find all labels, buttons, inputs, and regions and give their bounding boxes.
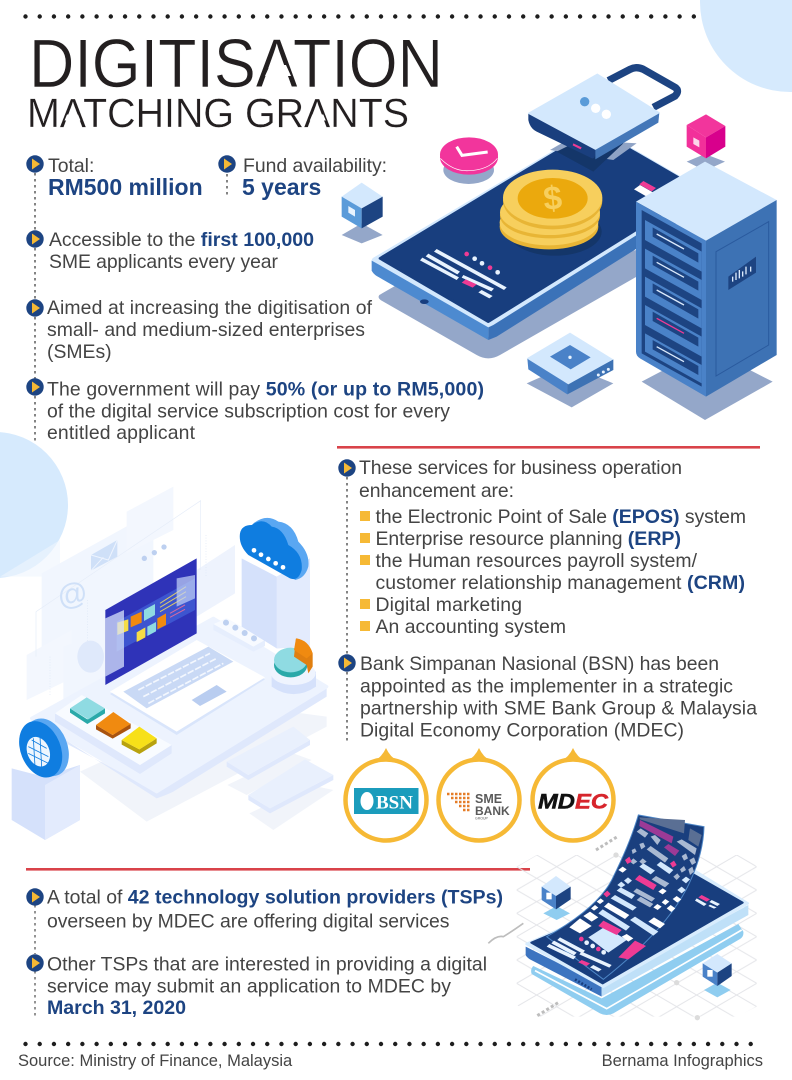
list: services: customer relationship management (CRM): [376, 572, 745, 594]
list: services: Enterprise resource planning (ERP): [376, 528, 681, 550]
phone: [372, 129, 703, 340]
fact: accessible: SME applicants every year: [49, 251, 279, 273]
fact: fund availability: Fund availability:: [243, 155, 387, 177]
list: services: the Human resources payroll system/: [376, 550, 698, 572]
text: BSN implementer: appointed as the implementer in a strategic: [360, 676, 733, 698]
small pill panel: [213, 618, 265, 652]
fact: fund availability: 5 years: [242, 174, 321, 200]
divider: lower red rule: [26, 868, 530, 871]
fact: TSPs: overseen by MDEC are offering digital services: [47, 910, 450, 932]
desk: [32, 618, 327, 798]
shadow of desk: [80, 703, 327, 822]
laptop screen: [105, 558, 197, 685]
dotted rule: top: [26, 14, 705, 19]
fact: TSPs: A total of 42 technology solution providers (TSPs): [47, 886, 503, 908]
list: services: the Electronic Point of Sale (EPOS) system: [376, 506, 746, 528]
colour key tray: [55, 695, 172, 774]
fact: other TSPs: March 31, 2020: [47, 997, 186, 1019]
phone body: [526, 870, 748, 997]
illustration: phone with coins, padlock and server: [372, 68, 777, 420]
ghost panels: [0, 487, 235, 700]
fact: government payment: entitled applicant: [47, 422, 196, 444]
dotted rule: bottom: [26, 1042, 763, 1046]
title: DIGITISATION: [29, 25, 443, 102]
illustration: phone with curling document: [488, 815, 757, 1020]
icon: blue cube: [342, 183, 383, 243]
fact: aim: (SMEs): [47, 341, 112, 363]
fact: government payment: of the digital service subscription cost for every: [47, 400, 450, 422]
logo: SME Bank: SME: [475, 792, 502, 806]
gold coin stack: [500, 170, 602, 256]
icon: cube right: [703, 954, 732, 997]
server rack: [636, 162, 777, 420]
fact: total: RM500 million: [48, 174, 203, 200]
logo: BSN: BSN: [376, 792, 413, 814]
decorative circle: top right: [700, 0, 792, 92]
icon: at sign: @: [54, 576, 91, 614]
fact: other TSPs: Other TSPs that are interested in providing a digital: [47, 954, 487, 976]
bullet markers and dotted connectors: [26, 155, 356, 1018]
text: services: enhancement are:: [359, 480, 514, 502]
title: MATCHING GRANTS: [27, 90, 409, 136]
decorative circle: left: [0, 432, 68, 578]
fact: total: [48, 155, 203, 200]
laptop base: [110, 640, 265, 735]
phone shadow: [379, 250, 637, 358]
fact: aim: small- and medium-sized enterprises: [47, 319, 365, 341]
text: BSN implementer: Digital Economy Corporation (MDEC): [360, 720, 684, 742]
text: BSN implementer: [360, 653, 757, 742]
logo: BSN: [346, 748, 426, 840]
list: services: Digital marketing: [376, 594, 522, 616]
source: Source: Ministry of Finance, Malaysia: [18, 1052, 293, 1070]
logo: MDEC: MDEC: [538, 790, 609, 814]
text: services: These services for business operation: [359, 457, 682, 479]
logo: SME Bank: [438, 748, 520, 840]
logo: MDEC: [532, 748, 614, 840]
text: BSN implementer: Bank Simpanan Nasional (BSN) has been: [360, 653, 719, 675]
list: services: [360, 506, 746, 638]
fact: aim: Aimed at increasing the digitisation of: [47, 297, 373, 319]
icon: cube left: [542, 876, 571, 920]
pie chart on cylinder: [271, 638, 316, 694]
text: services: [359, 457, 682, 502]
fact: total: Total:: [48, 155, 94, 177]
fact: government payment: The government will pay 50% (or up to RM5,000): [47, 378, 484, 400]
padlock: [528, 68, 677, 172]
fact: aim: [47, 297, 373, 363]
fact: other TSPs: service may submit an application to MDEC by: [47, 976, 451, 998]
curling document: [547, 815, 704, 979]
fact: TSPs: [47, 886, 503, 932]
gold coin stack: $: [542, 180, 564, 218]
cloud on pillar: [240, 518, 310, 648]
divider: upper red rule: [337, 446, 760, 449]
pink check badge: [440, 137, 498, 184]
text: BSN implementer: partnership with SME Bank Group & Malaysia: [360, 698, 757, 720]
phone screen details: [547, 937, 612, 989]
list: services: An accounting system: [376, 616, 566, 638]
fact: fund availability: [242, 155, 387, 200]
fact: other TSPs: [47, 954, 487, 1019]
fact: accessible: Accessible to the first 100,000: [49, 229, 314, 251]
small dots and squiggle: [488, 837, 700, 1020]
floating pads: [227, 727, 333, 830]
pink cube: [687, 114, 725, 171]
title: [27, 25, 443, 136]
phone base layer: [531, 924, 743, 1015]
icon: envelope: [91, 540, 117, 571]
fact: government payment: [47, 378, 484, 444]
isometric grid: [517, 855, 757, 1017]
illustration: laptop on desk with cloud, globe and chart: [0, 487, 333, 840]
credit: Bernama Infographics: [602, 1052, 763, 1070]
logo: SME Bank: BANK: [475, 804, 510, 818]
dots: [142, 544, 167, 561]
fact: accessible: [49, 229, 314, 273]
logo: SME Bank: GROUP: [475, 816, 488, 820]
router box: [527, 333, 613, 407]
globe on pillar: [11, 712, 80, 840]
